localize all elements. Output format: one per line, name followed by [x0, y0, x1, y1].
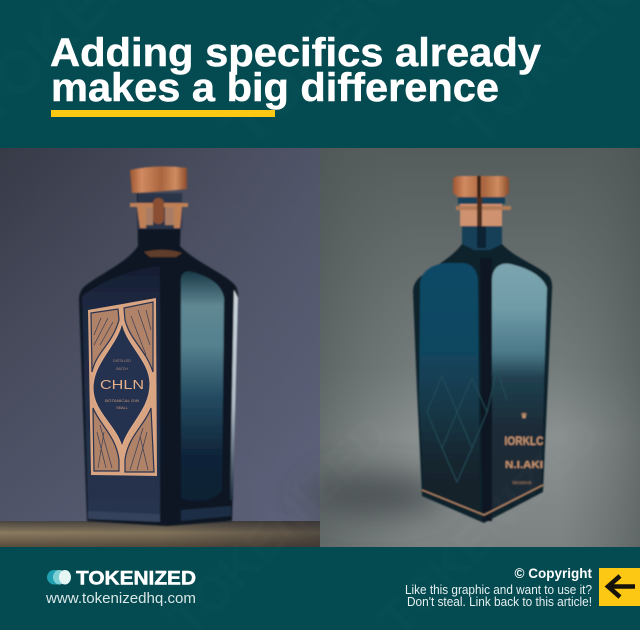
- cap: [130, 166, 187, 193]
- bottle lettering: N.I.AKI: [505, 460, 543, 471]
- copyright notice: [405, 566, 592, 609]
- cap: [453, 176, 509, 197]
- base gold line: [422, 485, 543, 515]
- bottle lettering: ♛: [521, 412, 527, 420]
- label rays: [94, 310, 151, 470]
- icon: yellow arrow box: [599, 568, 640, 606]
- neck glass: [462, 226, 502, 250]
- collar: [458, 197, 505, 204]
- label corner ornaments: [91, 302, 154, 472]
- bottle lettering: IORKLC: [504, 434, 544, 448]
- label lettering: DISTILLED: [113, 359, 131, 363]
- icon: left bottle: [79, 166, 238, 526]
- label lettering: [100, 359, 144, 410]
- copyright notice: Don't steal. Link back to this article!: [407, 595, 592, 609]
- bottle lettering: RESERVE: [512, 480, 532, 485]
- panel: left bottle photo: [0, 148, 320, 547]
- title underline: [51, 110, 275, 117]
- icon: logo mark: [47, 570, 71, 584]
- label lettering: CHLN: [100, 377, 144, 392]
- icon: right bottle: [413, 176, 552, 523]
- logo: [47, 568, 196, 590]
- label lettering: BATCH: [116, 367, 128, 371]
- website url: www.tokenizedhq.com: [45, 590, 196, 607]
- label lettering: SMALL: [116, 406, 128, 410]
- neck collar: [130, 193, 188, 229]
- title: Adding specifics already: [50, 31, 542, 75]
- bottle lettering: [504, 412, 544, 485]
- copyright notice: Like this graphic and want to use it?: [405, 583, 592, 597]
- floor: [0, 521, 320, 547]
- label lettering: BOTANICAL GIN: [105, 398, 139, 403]
- neck shoulder ornament: [144, 250, 182, 257]
- copyright notice: © Copyright: [515, 566, 592, 581]
- header watermark: [0, 0, 640, 160]
- label diamond: [93, 322, 150, 447]
- diamond pattern: [427, 370, 507, 482]
- footer watermark: [158, 405, 611, 630]
- label on left bottle: [88, 298, 157, 476]
- panel: right bottle photo: [305, 148, 640, 547]
- bottle shadow: [305, 475, 445, 515]
- title: [50, 31, 542, 110]
- title: makes a big difference: [51, 66, 499, 110]
- logo wordmark: TOKENIZED: [76, 568, 196, 590]
